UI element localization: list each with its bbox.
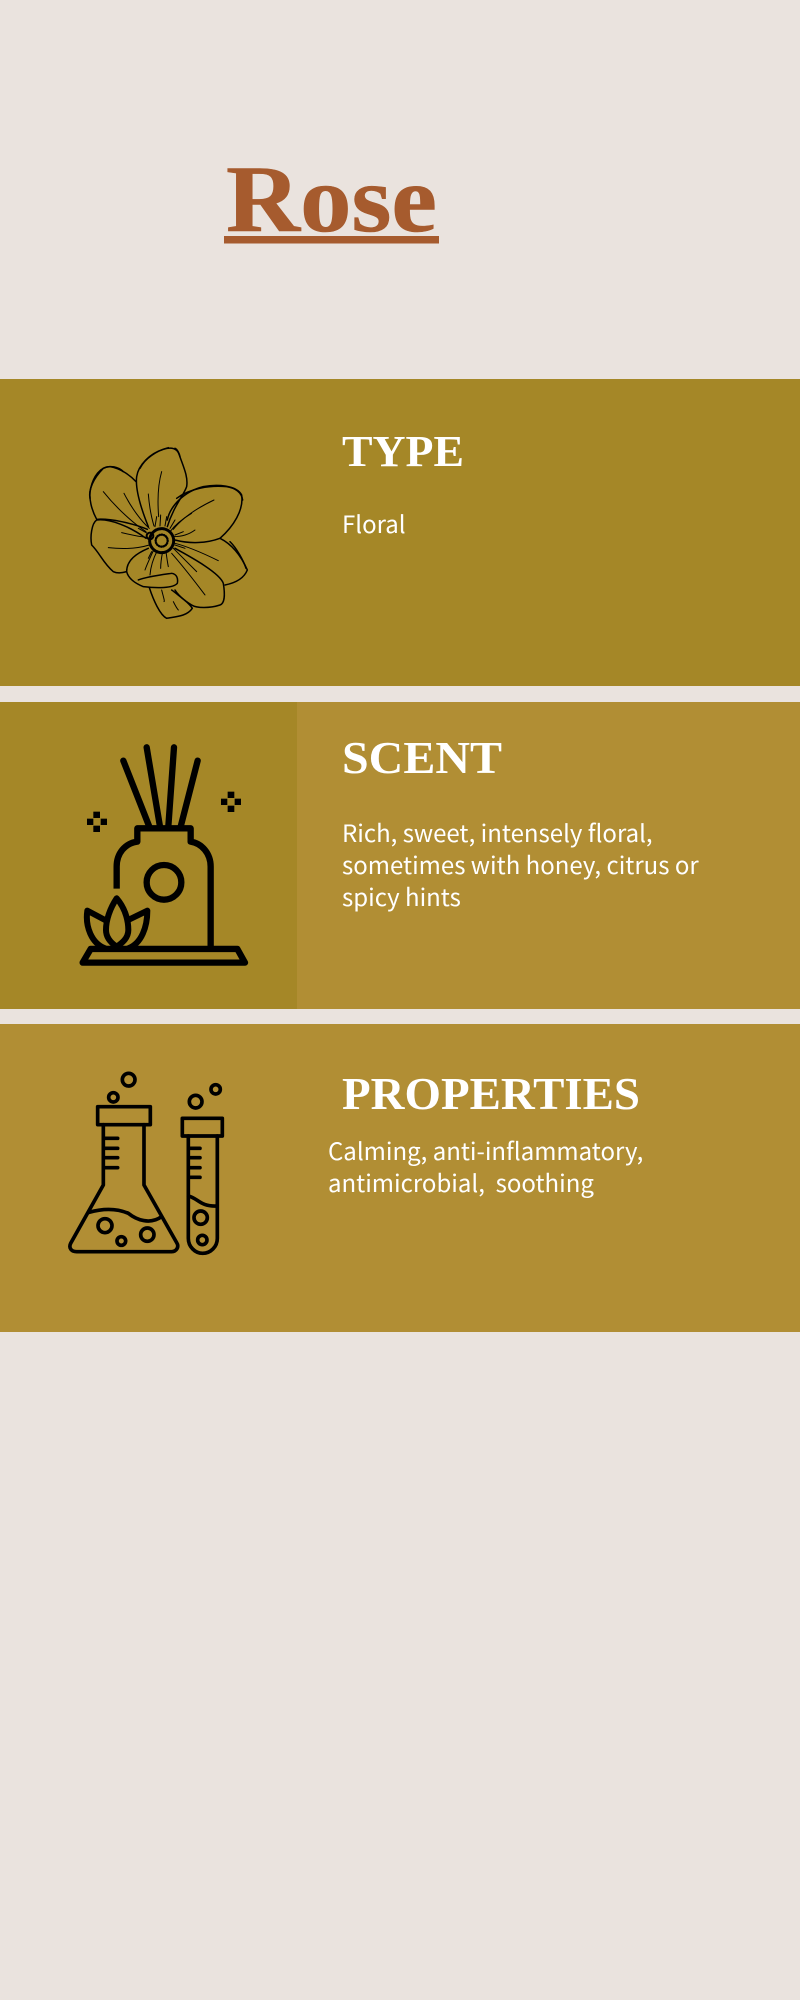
text: properties description: Calming, anti-inflammatory, [328,1132,643,1167]
panel: type [0,379,800,686]
panel: scent [0,702,800,1009]
icon: lab glassware [70,1073,222,1253]
text: scent description: spicy hints [342,878,461,913]
title: Rose: Rose [226,146,437,252]
text: scent description [342,814,699,913]
icon: flower [90,448,247,618]
text: floral: Floral [342,505,406,540]
text: properties description: antimicrobial, soothing [328,1164,594,1199]
icon: reed diffuser [83,747,245,963]
text: properties description [328,1132,643,1199]
text: scent description: Rich, sweet, intensely floral, [342,814,653,849]
text: scent description: sometimes with honey, citrus or [342,846,699,881]
panel: properties [0,1024,800,1332]
heading: properties: PROPERTIES [342,1068,640,1119]
heading: type: TYPE [342,427,464,476]
heading: scent: SCENT [342,732,502,783]
